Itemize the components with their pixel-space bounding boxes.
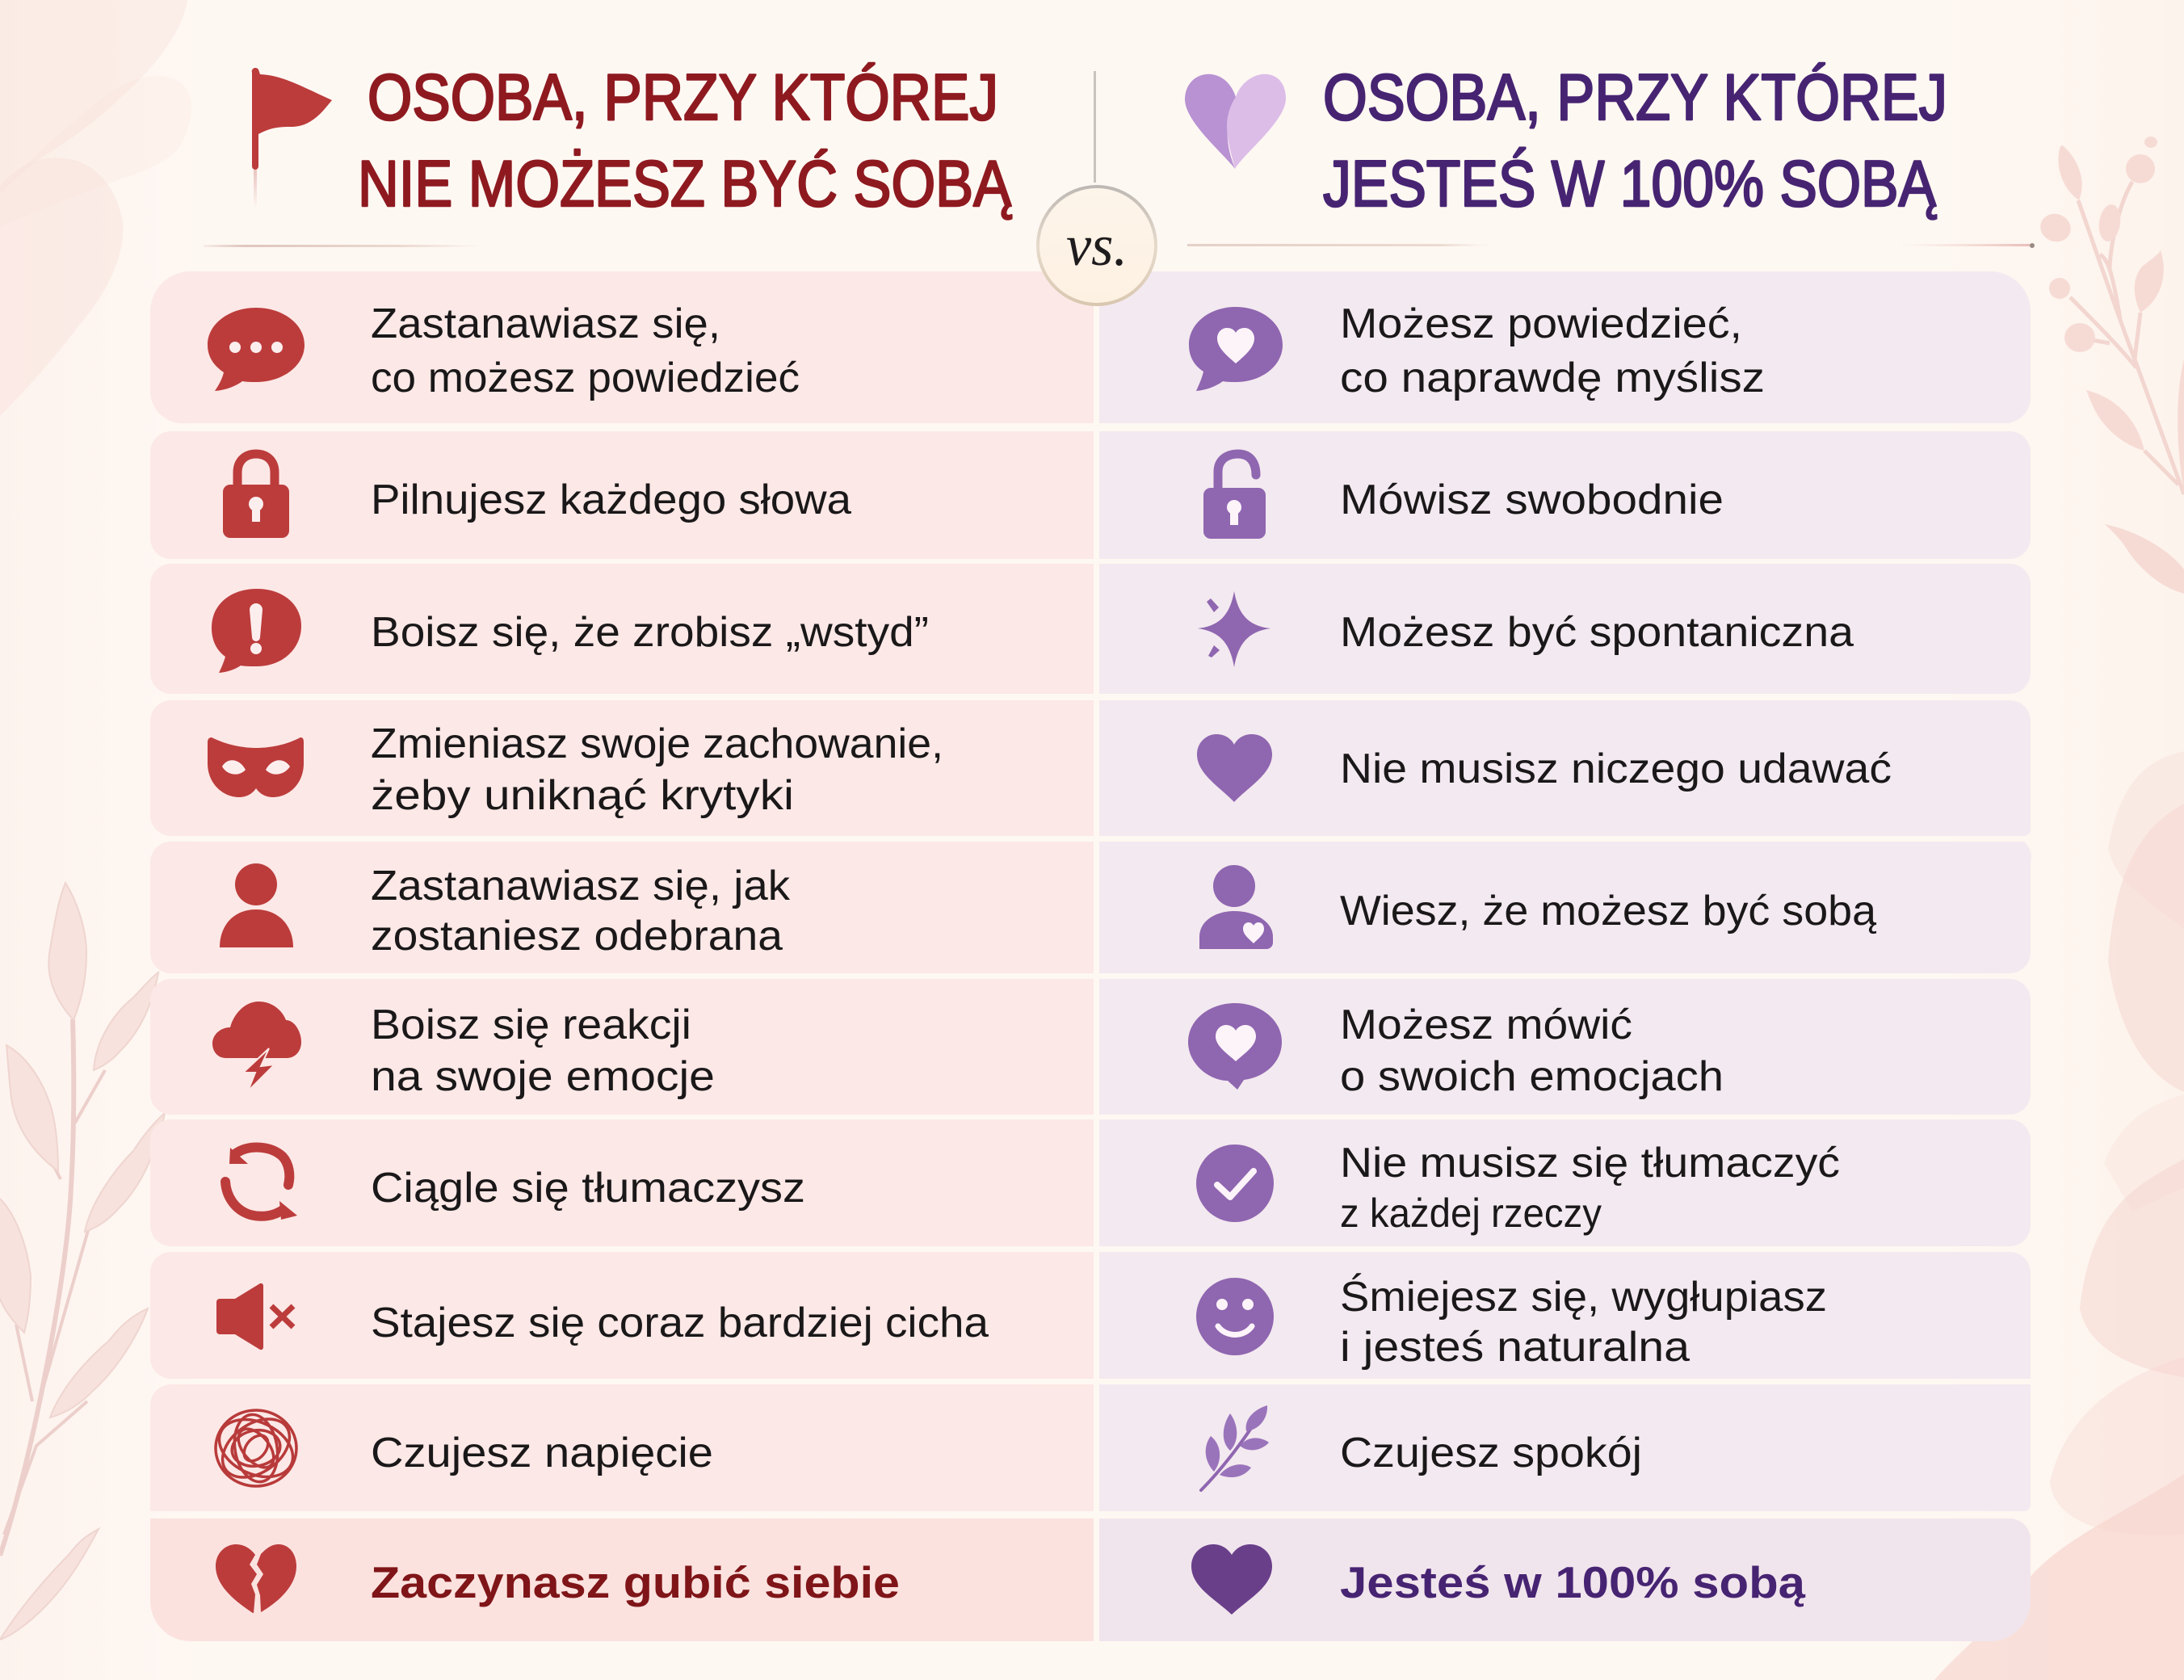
row 6 left bbox=[212, 1002, 715, 1100]
row 5 left bbox=[220, 863, 791, 960]
icon: tangled scribble bbox=[210, 1407, 302, 1489]
text: Możesz powiedzieć, bbox=[1340, 300, 1742, 347]
text: Jesteś w 100% sobą bbox=[1340, 1557, 1805, 1607]
text: na swoje emocje bbox=[371, 1053, 715, 1100]
text: Mówisz swobodnie bbox=[1340, 477, 1724, 523]
heading: left: NIE MOŻESZ BYĆ SOBĄ bbox=[358, 148, 1012, 220]
text: Ciągle się tłumaczysz bbox=[371, 1165, 805, 1212]
heading: right: JESTEŚ W 100% SOBĄ bbox=[1323, 147, 1937, 220]
row 9 left bbox=[210, 1407, 713, 1489]
icon: person bbox=[220, 863, 293, 947]
row 3 left bbox=[212, 589, 929, 673]
row 10 right bbox=[1191, 1544, 1805, 1615]
icon: olive branch bbox=[1201, 1405, 1269, 1490]
text: Boisz się reakcji bbox=[371, 1002, 691, 1048]
text: Możesz być spontaniczna bbox=[1340, 609, 1854, 656]
text: co naprawdę myślisz bbox=[1340, 355, 1765, 401]
text: Wiesz, że możesz być sobą bbox=[1340, 888, 1876, 934]
icon: exclamation bubble bbox=[212, 589, 301, 673]
text bbox=[371, 1002, 715, 1100]
icon: person with heart bbox=[1199, 865, 1273, 949]
icon: speech bubble with dots bbox=[208, 308, 304, 391]
row 5 right bbox=[1199, 865, 1876, 949]
icon: smiley bbox=[1196, 1278, 1274, 1355]
row 4 left bbox=[208, 720, 943, 819]
text: Nie musisz się tłumaczyć bbox=[1340, 1140, 1840, 1186]
text: Zastanawiasz się, bbox=[371, 300, 720, 347]
row 2 right bbox=[1203, 454, 1724, 539]
text: Zaczynasz gubić siebie bbox=[371, 1557, 900, 1607]
icon: refresh arrows bbox=[225, 1148, 297, 1220]
icon: open padlock bbox=[1203, 454, 1266, 539]
row 10 left bbox=[216, 1544, 900, 1613]
icon: round bubble with heart bbox=[1188, 1003, 1282, 1090]
row 8 left bbox=[216, 1283, 989, 1350]
text bbox=[1340, 300, 1765, 401]
text: Pilnujesz każdego słowa bbox=[371, 477, 851, 523]
panel: left column rows bbox=[150, 271, 1094, 1641]
row 7 right bbox=[1196, 1140, 1840, 1236]
decorative divider lines bbox=[204, 243, 2035, 248]
panel: right column rows bbox=[1099, 271, 2031, 1641]
watercolor: left branch bbox=[0, 883, 165, 1640]
text: Boisz się, że zrobisz „wstyd” bbox=[371, 609, 929, 656]
icon: mask bbox=[208, 737, 304, 797]
watercolor: right side blobs bbox=[1934, 751, 2184, 1680]
watercolor: top-left blobs bbox=[0, 0, 191, 416]
heading: right: OSOBA, PRZY KTÓREJ bbox=[1323, 61, 1947, 134]
row 7 left bbox=[225, 1148, 805, 1220]
text: i jesteś naturalna bbox=[1340, 1324, 1690, 1371]
icon: sparkle bbox=[1198, 591, 1270, 667]
text: Czujesz spokój bbox=[1340, 1430, 1642, 1476]
row 3 right bbox=[1198, 591, 1854, 667]
text: Czujesz napięcie bbox=[371, 1430, 713, 1476]
row 6 right bbox=[1188, 1002, 1724, 1100]
icon: storm cloud bbox=[212, 1002, 301, 1091]
watercolor: right branch bbox=[2036, 136, 2184, 594]
icon: check circle bbox=[1196, 1144, 1274, 1222]
row 1 right bbox=[1189, 300, 1765, 401]
row 4 right bbox=[1197, 734, 1892, 802]
icon: closed padlock bbox=[223, 454, 289, 538]
text: Możesz mówić bbox=[1340, 1002, 1632, 1048]
text: Stajesz się coraz bardziej cicha bbox=[371, 1300, 989, 1346]
text: o swoich emocjach bbox=[1340, 1053, 1724, 1100]
text: żeby uniknąć krytyki bbox=[371, 772, 794, 819]
icon: heart bbox=[1197, 734, 1272, 802]
text: z każdej rzeczy bbox=[1340, 1191, 1602, 1236]
text bbox=[1340, 1140, 1840, 1236]
icon: dark heart bbox=[1191, 1544, 1272, 1615]
text bbox=[1340, 1002, 1724, 1100]
text: Śmiejesz się, wygłupiasz bbox=[1340, 1273, 1827, 1321]
heading: right bbox=[1323, 61, 1947, 220]
text: Zastanawiasz się, jak bbox=[371, 863, 791, 909]
text: Nie musisz niczego udawać bbox=[1340, 746, 1892, 792]
icon: broken heart bbox=[216, 1544, 296, 1613]
vs badge: vs. bbox=[1066, 213, 1128, 278]
row 8 right bbox=[1196, 1273, 1827, 1371]
heading: left bbox=[358, 61, 1012, 220]
icon: folded heart bbox=[1185, 74, 1286, 169]
icon: red flag bbox=[252, 68, 332, 208]
text bbox=[1340, 1273, 1827, 1371]
row 2 left bbox=[223, 454, 851, 538]
heading: left: OSOBA, PRZY KTÓREJ bbox=[368, 61, 998, 134]
icon: muted speaker bbox=[216, 1283, 293, 1350]
row 9 right bbox=[1201, 1405, 1642, 1490]
text: co możesz powiedzieć bbox=[371, 355, 800, 401]
text: Zmieniasz swoje zachowanie, bbox=[371, 720, 943, 767]
icon: speech bubble with heart bbox=[1189, 307, 1283, 391]
text: zostaniesz odebrana bbox=[371, 913, 783, 960]
text bbox=[371, 720, 943, 819]
row 1 left bbox=[208, 300, 800, 401]
text bbox=[371, 863, 791, 960]
text bbox=[371, 300, 800, 401]
vs badge bbox=[1038, 71, 1156, 304]
